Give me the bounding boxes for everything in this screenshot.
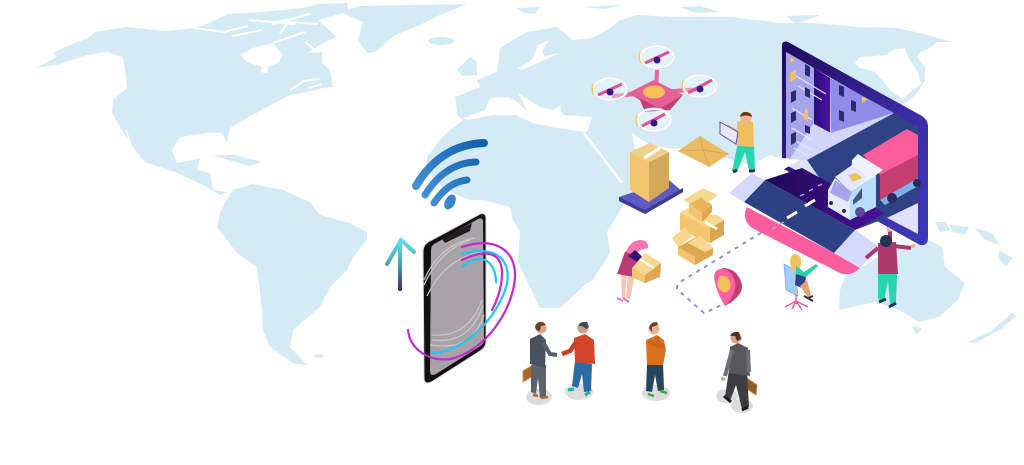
torso	[878, 242, 898, 274]
left flap	[729, 173, 765, 202]
person packing a box	[617, 240, 661, 302]
businessman walking	[716, 332, 757, 413]
businessman with briefcase	[523, 322, 557, 405]
truck	[828, 129, 921, 220]
cab rear	[850, 154, 883, 215]
held box	[632, 268, 645, 283]
head	[578, 322, 588, 334]
jeans	[646, 363, 664, 392]
sidewalk	[789, 113, 894, 160]
Arctic channels	[194, 14, 318, 52]
head	[536, 322, 546, 334]
hair and head	[790, 254, 801, 272]
jacket	[530, 334, 546, 368]
purple building	[814, 68, 830, 133]
Falkland	[314, 354, 324, 358]
sweater	[574, 334, 595, 364]
cab side window	[853, 188, 862, 205]
smartphone	[408, 214, 515, 383]
jeans	[572, 361, 592, 392]
laptop frame	[782, 42, 928, 245]
tall box	[630, 152, 649, 202]
hand	[721, 377, 725, 381]
Iceland	[428, 37, 454, 45]
continents: Eurasia and Africa	[427, 15, 953, 308]
laptop screen	[786, 52, 918, 234]
briefcase	[523, 365, 533, 382]
legs	[800, 280, 811, 297]
screen flap edge	[752, 158, 800, 180]
shoes	[733, 170, 755, 172]
shoes	[804, 296, 813, 301]
road dashes	[787, 200, 815, 218]
arm	[725, 350, 749, 376]
road floor	[765, 168, 885, 230]
shadow	[716, 389, 738, 403]
headlights	[829, 201, 833, 205]
man with raised arms	[866, 227, 915, 307]
head	[880, 235, 892, 247]
skirt	[617, 248, 640, 278]
Newfoundland gulf	[290, 79, 322, 90]
shoes	[648, 391, 667, 396]
body	[796, 264, 818, 277]
shoes	[879, 299, 896, 307]
screen swirl rings	[424, 238, 484, 346]
middle box	[680, 213, 710, 243]
torso	[737, 120, 754, 147]
cab front	[828, 178, 850, 220]
magenta and cyan signal arcs	[408, 243, 515, 359]
arm	[543, 342, 557, 355]
cab roof	[835, 165, 867, 192]
legs	[878, 273, 897, 305]
yellow markers	[790, 57, 868, 122]
forearm	[648, 337, 664, 348]
shoes	[724, 396, 748, 410]
shoes	[568, 389, 590, 395]
head and hair	[626, 240, 648, 256]
chair	[784, 264, 798, 296]
jacket	[729, 343, 750, 376]
drone cable	[653, 128, 655, 152]
shoes	[533, 395, 548, 398]
rotor rings	[593, 46, 717, 131]
bottom box	[678, 247, 695, 265]
wheels	[855, 207, 865, 217]
briefcase	[743, 376, 757, 395]
shadow	[642, 385, 670, 401]
screen road	[807, 113, 918, 230]
sweater	[646, 335, 666, 365]
Red Sea	[584, 133, 622, 183]
Caribbean islands	[213, 155, 262, 166]
legs	[732, 143, 755, 172]
tablet	[720, 122, 738, 144]
dashed route	[677, 228, 769, 313]
drone	[592, 45, 718, 152]
world map	[36, 3, 1016, 365]
cab windshield	[830, 180, 852, 202]
head	[648, 324, 660, 334]
man in red sweater	[562, 322, 595, 400]
trailer side	[880, 155, 918, 200]
shadow	[526, 389, 552, 405]
envelope	[678, 136, 729, 167]
right flap	[834, 230, 880, 268]
hands	[888, 227, 915, 247]
pallet	[619, 180, 683, 214]
trailer chassis	[880, 178, 918, 205]
road surface	[744, 180, 855, 253]
cab sign	[848, 173, 862, 182]
continent: Australia	[839, 240, 965, 322]
legs	[725, 370, 749, 409]
arm	[562, 342, 576, 354]
Indonesia islands	[935, 222, 1012, 267]
top box	[689, 203, 702, 222]
icon: location pin	[714, 268, 742, 306]
drone arms	[612, 70, 700, 96]
phone body	[423, 214, 486, 383]
Sea of Okhotsk	[855, 48, 921, 100]
continent: North America	[36, 3, 348, 195]
seated person on office chair	[784, 254, 818, 310]
laptop with road and truck	[729, 42, 928, 274]
code lines	[792, 76, 826, 156]
phone screen	[430, 218, 484, 375]
rotor hubs	[606, 56, 704, 126]
legs	[621, 272, 635, 299]
icon: up arrow	[387, 240, 414, 289]
drone body	[628, 80, 683, 108]
icon: wifi signal	[416, 143, 484, 211]
rotor blades	[598, 52, 712, 126]
continent: South America	[217, 184, 367, 365]
trailer top	[863, 129, 918, 175]
shoes	[617, 298, 629, 302]
left code panel	[786, 52, 814, 160]
shadow	[565, 384, 593, 400]
rotor yellow slivers	[592, 52, 684, 126]
top	[628, 250, 648, 264]
legs	[531, 365, 546, 398]
arms	[866, 231, 911, 258]
head	[740, 112, 752, 124]
person with tablet	[720, 112, 755, 172]
head	[730, 332, 742, 344]
continent: Greenland	[340, 4, 467, 53]
Mediterranean Sea	[463, 93, 592, 132]
Baja gulf	[126, 130, 133, 152]
pallet with tall box	[619, 143, 683, 214]
skirt	[795, 274, 806, 289]
base pink	[745, 207, 860, 274]
Baltic Sea	[518, 40, 560, 70]
Arctic Russia islands	[515, 5, 820, 24]
Arabian gulf	[632, 133, 668, 160]
cab side	[850, 175, 876, 220]
Hudson Bay	[240, 43, 283, 73]
windows	[791, 64, 856, 145]
Britain	[457, 57, 477, 76]
man thinking in orange	[642, 322, 670, 401]
phone notch	[442, 223, 472, 243]
right building	[830, 78, 894, 133]
cardboard box stack	[672, 188, 724, 265]
Tasmania	[912, 326, 922, 335]
New Zealand	[967, 313, 1016, 343]
rotor ring shading	[592, 45, 718, 132]
